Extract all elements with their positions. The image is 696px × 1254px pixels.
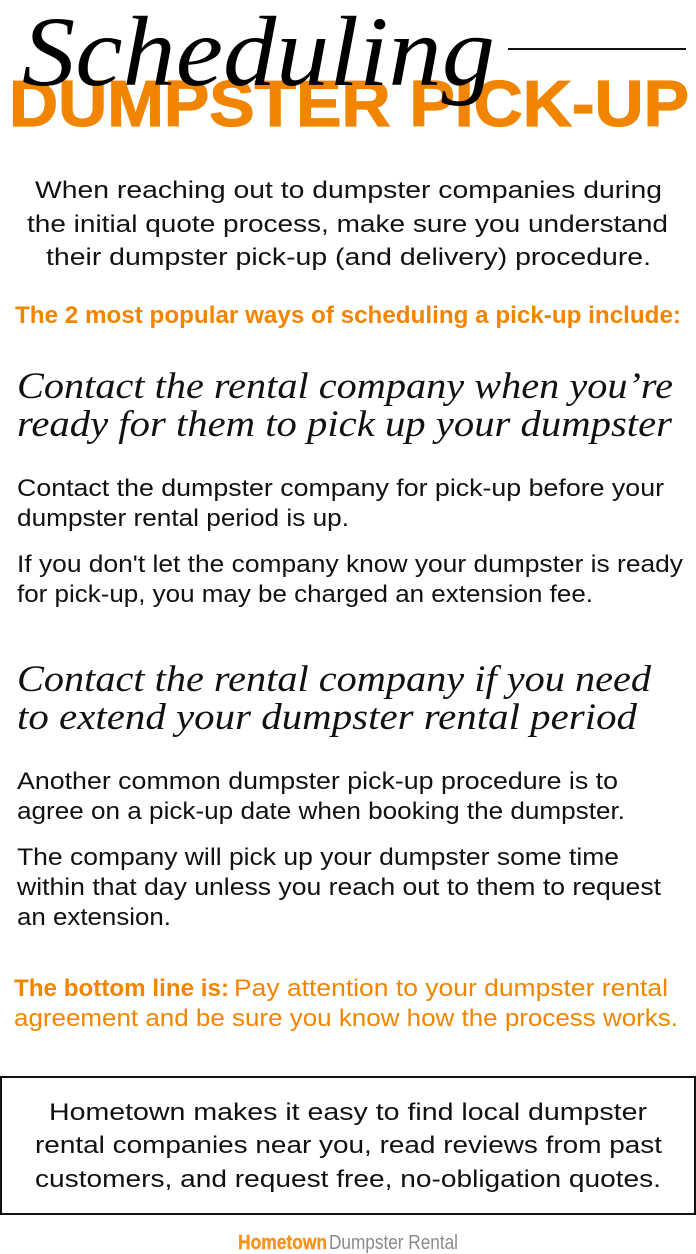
section 1 heading: Contact the rental company when you’re bbox=[17, 366, 673, 407]
section 2 heading: to extend your dumpster rental period bbox=[17, 697, 638, 738]
panel: hometown box: rental companies near you, read reviews from past bbox=[35, 1132, 662, 1159]
section 2 body: The company will pick up your dumpster some time bbox=[17, 844, 619, 871]
panel: hometown box: customers, and request free, no-obligation quotes. bbox=[35, 1166, 661, 1193]
bottom line callout bbox=[14, 975, 678, 1032]
section 1 body: dumpster rental period is up. bbox=[17, 505, 349, 532]
logo: hometown dumpster rental: Hometown bbox=[238, 1232, 327, 1254]
section 2 heading: Contact the rental company if you need bbox=[17, 659, 652, 700]
section 1 body: for pick-up, you may be charged an extension fee. bbox=[17, 581, 593, 608]
orange lead-in: The 2 most popular ways of scheduling a pick-up include: bbox=[15, 302, 681, 329]
intro paragraph: When reaching out to dumpster companies during bbox=[35, 177, 662, 204]
intro paragraph: the initial quote process, make sure you understand bbox=[27, 211, 668, 238]
logo: hometown dumpster rental bbox=[238, 1232, 458, 1254]
panel: hometown box: Hometown makes it easy to find local dumpster bbox=[49, 1099, 647, 1126]
section 2 heading bbox=[17, 659, 652, 738]
panel: hometown box bbox=[1, 1077, 695, 1214]
section 2 body: within that day unless you reach out to them to request bbox=[16, 874, 661, 901]
section 2 body: agree on a pick-up date when booking the dumpster. bbox=[17, 798, 625, 825]
section 1 heading bbox=[17, 366, 673, 445]
bottom line callout: Pay attention to your dumpster rental bbox=[234, 975, 668, 1002]
logo: hometown dumpster rental: Dumpster Rental bbox=[329, 1232, 458, 1254]
section 2 body bbox=[16, 768, 661, 931]
section 2 body: an extension. bbox=[17, 904, 171, 931]
intro paragraph bbox=[27, 177, 668, 271]
section 1 heading: ready for them to pick up your dumpster bbox=[17, 404, 673, 445]
bottom line callout: agreement and be sure you know how the process works. bbox=[14, 1005, 678, 1032]
bottom line callout: The bottom line is: bbox=[14, 975, 229, 1002]
title rule bbox=[508, 48, 686, 50]
intro paragraph: their dumpster pick-up (and delivery) procedure. bbox=[46, 244, 651, 271]
section 1 body: If you don't let the company know your dumpster is ready bbox=[17, 551, 684, 578]
subtitle: dumpster pick-up: DUMPSTER PICK-UP bbox=[9, 67, 689, 140]
section 1 body: Contact the dumpster company for pick-up before your bbox=[17, 475, 664, 502]
section 2 body: Another common dumpster pick-up procedure is to bbox=[17, 768, 618, 795]
section 1 body bbox=[17, 475, 684, 608]
